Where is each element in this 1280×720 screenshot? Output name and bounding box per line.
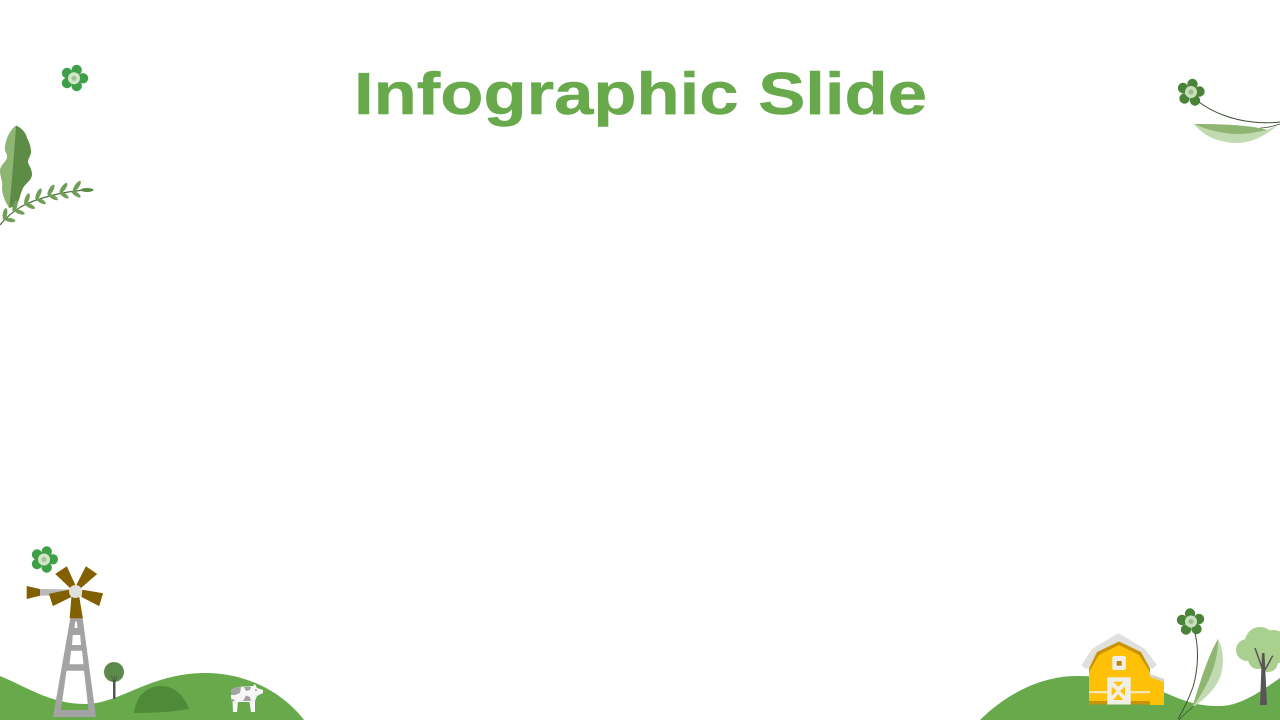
barn body — [1089, 642, 1150, 704]
barn window — [1112, 656, 1126, 670]
icon: tree right — [1236, 627, 1280, 705]
hill: bottom right — [980, 676, 1280, 720]
icon: flower bottom left — [32, 546, 58, 573]
icon: flower bottom right — [1177, 608, 1204, 635]
hill: bottom left — [0, 673, 304, 720]
title: Infographic Slide — [354, 61, 927, 127]
barn annex — [1150, 675, 1164, 705]
barn roof — [1082, 633, 1157, 668]
plant: sprig — [0, 180, 94, 225]
windmill blades — [49, 567, 103, 618]
icon: flower top right — [1178, 79, 1205, 106]
icon: cow — [231, 684, 263, 712]
stem and leaf top right — [1194, 102, 1280, 143]
windmill hub — [69, 585, 82, 598]
windmill tail — [40, 589, 70, 596]
barn door — [1107, 677, 1131, 704]
icon: small tree — [104, 662, 124, 699]
icon: barn — [1082, 633, 1164, 705]
hill mound — [134, 686, 189, 713]
icon: windmill — [27, 567, 103, 717]
icon: flower top left — [62, 65, 88, 91]
plant: large wavy leaf — [0, 126, 32, 208]
windmill tower — [53, 617, 96, 717]
stem and leaf bottom right — [1178, 633, 1223, 720]
